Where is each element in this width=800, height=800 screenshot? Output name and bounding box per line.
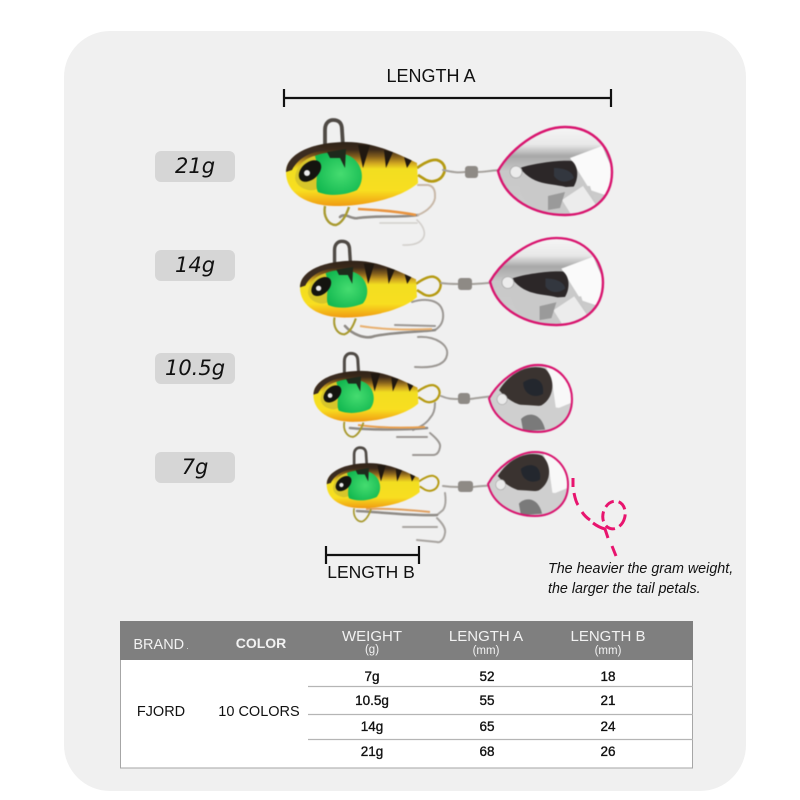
weight label: 10.5g [155, 353, 235, 384]
callout text [548, 561, 733, 597]
row: 21g: 68 [479, 744, 495, 759]
row: 14g: 24 [600, 719, 616, 734]
row: 10.5g: 21 [600, 693, 616, 708]
table body [120, 622, 692, 768]
dashed callout pointer [573, 478, 628, 556]
lure: 21g [286, 120, 615, 245]
row: 14g [361, 719, 616, 734]
weight label: 14g [155, 250, 235, 281]
weight label: 21g [155, 151, 235, 182]
dimension: length B: LENGTH B [327, 562, 415, 582]
row: 21g: 26 [600, 744, 616, 759]
table header: BRAND . [133, 637, 189, 653]
row: 21g [361, 744, 616, 759]
merged cells: 10 COLORS [218, 704, 300, 720]
dimension: length A [284, 66, 611, 107]
merged cells: FJORD [137, 704, 185, 720]
row: 21g: 21g [361, 744, 383, 759]
weight label: 21g: 21g [175, 154, 215, 178]
table header: COLOR [236, 635, 286, 651]
row: 10.5g [355, 693, 616, 708]
merged cells [137, 704, 300, 720]
table header: LENGTH B [570, 628, 646, 645]
weight label: 7g [155, 452, 235, 483]
table header: (mm) [595, 645, 622, 657]
row: 14g: 65 [479, 719, 495, 734]
row: 10.5g: 55 [479, 693, 495, 708]
row: 14g: 14g [361, 719, 383, 734]
row: 7g: 52 [479, 669, 495, 684]
row: 7g: 18 [600, 669, 616, 684]
dimension: length B [326, 546, 419, 582]
weight label: 10.5g: 10.5g [165, 356, 225, 380]
table header: (g) [365, 644, 379, 656]
weight label: 7g: 7g [182, 455, 208, 479]
lure: 14g [300, 238, 606, 367]
row: 7g [364, 669, 616, 684]
row: 7g: 7g [364, 669, 380, 684]
callout text: the larger the tail petals. [548, 581, 701, 597]
table header: LENGTH A [449, 628, 523, 645]
row: 10.5g: 10.5g [355, 693, 389, 708]
callout text: The heavier the gram weight, [548, 561, 733, 577]
lure: 10.5g [313, 353, 574, 455]
table header: WEIGHT [342, 628, 402, 645]
dimension: length A: LENGTH A [386, 66, 476, 86]
weight label: 14g: 14g [175, 253, 215, 277]
table header: (mm) [473, 645, 500, 657]
specification table [120, 621, 693, 768]
table header [120, 621, 693, 660]
lure: 7g [327, 448, 570, 542]
